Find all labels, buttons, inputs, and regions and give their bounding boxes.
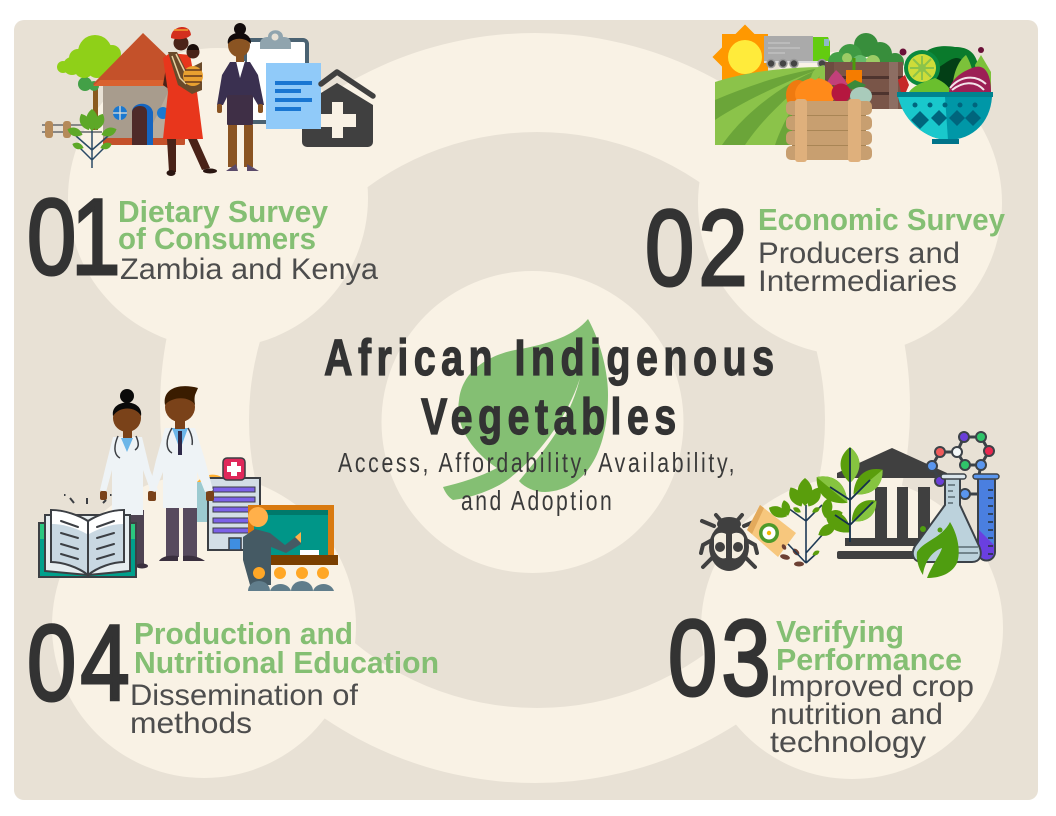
text 04 — [130, 679, 359, 740]
number 04: 04 — [27, 603, 134, 723]
heading 03 — [776, 615, 962, 677]
illustration: community and health — [42, 23, 373, 176]
icon: female doctor — [100, 389, 158, 568]
heading 02: Economic Survey — [758, 203, 1005, 237]
icon: field — [715, 67, 825, 145]
icon: house — [93, 33, 185, 145]
text 03 — [770, 670, 974, 759]
text 02: Producers and — [758, 237, 960, 270]
panel: step 01 dietary survey — [27, 177, 378, 297]
icon: truck — [764, 36, 830, 68]
text 02: Intermediaries — [758, 265, 957, 298]
icon: ladybug — [701, 515, 757, 571]
number 03: 03 — [668, 598, 775, 718]
text 01: Zambia and Kenya — [120, 253, 378, 286]
icon: flask leaf — [917, 522, 959, 578]
heading 04: Production and — [134, 617, 353, 651]
text 03: Improved crop — [770, 670, 974, 703]
text 03: nutrition and — [770, 698, 943, 731]
icon: central leaf — [443, 319, 608, 500]
icon: sun — [712, 24, 778, 90]
text 02 — [758, 237, 960, 298]
icon: temple — [837, 448, 947, 559]
icon: test tube — [973, 474, 999, 560]
icon: teacher at board — [243, 505, 338, 591]
icon: open book — [39, 495, 136, 577]
title: Vegetables — [421, 388, 682, 445]
heading 01 — [118, 195, 328, 256]
text 04: methods — [130, 707, 252, 740]
panel: step 03 verifying performance — [668, 598, 974, 759]
icon: tall plant — [810, 447, 889, 542]
icon: hospital — [197, 458, 260, 550]
subtitle: Access, Affordability, Availability, — [338, 447, 737, 479]
icon: carrot and beet — [826, 58, 866, 92]
icon: front crate with pumpkin — [786, 65, 872, 162]
subtitle — [338, 447, 737, 517]
heading 03: Performance — [776, 643, 962, 677]
icon: molecule — [927, 432, 994, 494]
heading 04: Nutritional Education — [134, 646, 439, 680]
text 03: technology — [770, 726, 926, 759]
heading 01: of Consumers — [118, 222, 316, 256]
panel: step 04 education — [27, 603, 439, 740]
icon: tree — [57, 35, 121, 130]
icon: medical home — [302, 72, 373, 147]
title: African Indigenous — [324, 329, 779, 386]
illustration: farm and market produce — [712, 24, 993, 162]
icon: seed packet — [747, 505, 804, 566]
icon: young plant — [767, 478, 844, 563]
heading 03: Verifying — [776, 615, 904, 649]
icon: salad bowl — [897, 46, 993, 144]
icon: document — [266, 63, 321, 129]
icon: mother with baby — [163, 27, 217, 176]
icon: male doctor — [148, 386, 214, 561]
illustration: education and dissemination — [39, 386, 338, 591]
icon: fence — [42, 121, 102, 138]
illustration: verification and research — [701, 432, 999, 578]
subtitle: and Adoption — [461, 486, 614, 517]
icon: flask — [913, 474, 981, 562]
heading 04 — [134, 617, 439, 680]
text 04: Dissemination of — [130, 679, 359, 712]
icon: clipboard — [245, 30, 307, 122]
icon: seedling — [66, 109, 118, 168]
icon: woman in suit — [217, 23, 264, 171]
panel: step 02 economic survey — [645, 188, 1005, 308]
number 01: 01 — [27, 177, 125, 297]
icon: back crate with greens — [825, 33, 904, 109]
number 02: 02 — [645, 188, 752, 308]
heading 01: Dietary Survey — [118, 195, 328, 229]
title — [324, 329, 779, 445]
